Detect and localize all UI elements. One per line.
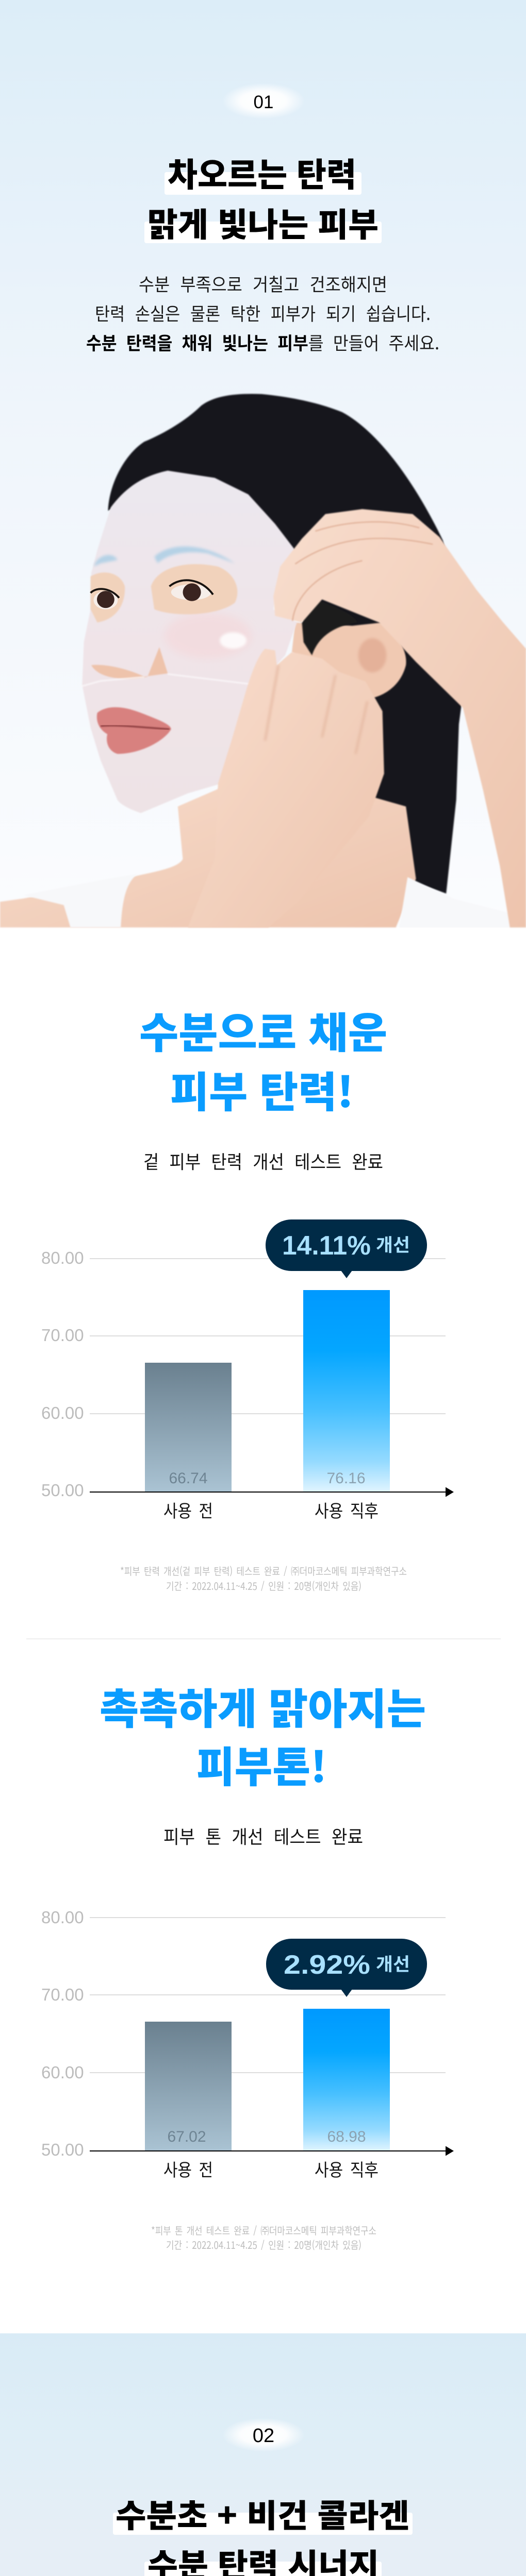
bar chart: elasticity: 50.00 (41, 1481, 84, 1500)
badge: 02 (222, 2418, 305, 2452)
callout: 14.11% 개선: 14.11% (282, 1231, 371, 1261)
heading: 수분으로 채운 피부 탄력!: 피부 탄력! (170, 1058, 354, 1120)
bar chart: skin tone (41, 1908, 454, 2181)
mask band highlight (80, 674, 252, 687)
heading: 수분으로 채운 피부 탄력!: 수분으로 채운 (139, 999, 387, 1060)
lips (97, 707, 171, 754)
footnote: 기간 : 2022.04.11~4.25 / 인원 : 20명(개인차 있음) (166, 2237, 361, 2252)
badge: 01 (222, 83, 305, 119)
bar: before (145, 1363, 232, 1492)
footnote: *피부 톤 개선 테스트 완료 / ㈜더마코스메틱 피부과학연구소 (151, 2223, 376, 2238)
callout: 14.11% 개선: 개선 (376, 1231, 410, 1257)
panel: skin tone chart section (41, 1675, 454, 2252)
panel: section 01 hero (0, 0, 526, 927)
photo: woman applying hydrogel mask (0, 394, 526, 927)
footnote (120, 1563, 407, 1593)
panel: elasticity chart section (41, 999, 454, 1593)
lower hand (188, 649, 384, 927)
neck and chest (0, 767, 416, 927)
bar chart: skin tone: 60.00 (41, 2063, 84, 2082)
footnote: *피부 탄력 개선(겉 피부 탄력) 테스트 완료 / ㈜더마코스메틱 피부과학연구소 (120, 1563, 407, 1578)
hair behind ear (302, 600, 357, 655)
callout: 2.92% 개선: 2.92% (284, 1950, 370, 1980)
title: 수분초 + 비건 콜라겐 수분 탄력 시너지: 수분초 + 비건 콜라겐 (116, 2490, 409, 2536)
callout: 14.11% 개선 (266, 1219, 427, 1278)
bar: before: 67.02 (167, 2128, 206, 2145)
heading: 촉촉하게 맑아지는 피부톤!: 피부톤! (196, 1733, 327, 1794)
bar chart: elasticity (41, 1219, 454, 1522)
bar chart: skin tone: 80.00 (41, 1908, 84, 1927)
text block: intro copy: 탄력 손실은 물론 탁한 피부가 되기 쉽습니다. (95, 300, 431, 326)
axis labels (163, 2156, 379, 2181)
bar: before: 66.74 (169, 1470, 208, 1487)
bar: after (303, 2009, 390, 2151)
panel: section 02 ingredient (0, 2333, 526, 2576)
callout: 2.92% 개선: 개선 (376, 1950, 410, 1976)
tank top (24, 874, 526, 927)
axis arrow (90, 1487, 454, 1497)
title: 차오르는 탄력 맑게 빛나는 피부 (144, 149, 382, 246)
axis labels: 사용 직후 (315, 2156, 379, 2181)
callout: 2.92% 개선 (266, 1939, 427, 1997)
upper hand and arm (273, 509, 526, 927)
axis labels: 사용 전 (163, 1497, 213, 1522)
footnote: 기간 : 2022.04.11~4.25 / 인원 : 20명(개인차 있음) (166, 1578, 361, 1593)
axis arrow (90, 2146, 454, 2156)
text block: intro copy (86, 270, 439, 355)
hair (108, 394, 470, 893)
title: 차오르는 탄력 맑게 빛나는 피부: 차오르는 탄력 (168, 149, 356, 196)
bar chart: skin tone: 50.00 (41, 2140, 84, 2159)
title: 수분초 + 비건 콜라겐 수분 탄력 시너지 (113, 2490, 413, 2576)
heading: 촉촉하게 맑아지는 피부톤!: 촉촉하게 맑아지는 (100, 1675, 426, 1736)
brow tint (94, 547, 235, 567)
heading: 수분으로 채운 피부 탄력! (139, 999, 387, 1120)
bar: after (303, 1290, 390, 1492)
axis labels (163, 1497, 379, 1522)
mask (82, 471, 297, 813)
bar chart: elasticity: 60.00 (41, 1403, 84, 1422)
bar chart: elasticity: 80.00 (41, 1248, 84, 1267)
bar: after: 68.98 (327, 2128, 366, 2145)
axis labels: 사용 직후 (315, 1497, 379, 1522)
heading: 촉촉하게 맑아지는 피부톤! (100, 1675, 426, 1794)
text block: intro copy: 수분 부족으로 거칠고 건조해지면 (139, 270, 387, 297)
nose (91, 647, 168, 679)
bar: before (145, 2022, 232, 2151)
bar: after: 76.16 (326, 1470, 366, 1487)
ear (292, 622, 406, 698)
bar chart: elasticity: 70.00 (41, 1326, 84, 1345)
footnote (151, 2223, 376, 2252)
text block: intro copy: 수분 탄력을 채워 빛나는 피부를 만들어 주세요. (86, 329, 439, 355)
badge: 01: 01 (254, 92, 273, 112)
axis labels: 사용 전 (163, 2156, 213, 2181)
badge: 02: 02 (253, 2425, 274, 2447)
gloss highlights (220, 632, 246, 649)
eye holes (151, 564, 237, 614)
title: 차오르는 탄력 맑게 빛나는 피부: 맑게 빛나는 피부 (147, 199, 379, 246)
cheek tint (165, 613, 252, 658)
bar chart: skin tone: 70.00 (41, 1985, 84, 2004)
subheading: 피부 톤 개선 테스트 완료 (163, 1822, 363, 1849)
subheading: 겉 피부 탄력 개선 테스트 완료 (143, 1147, 383, 1174)
